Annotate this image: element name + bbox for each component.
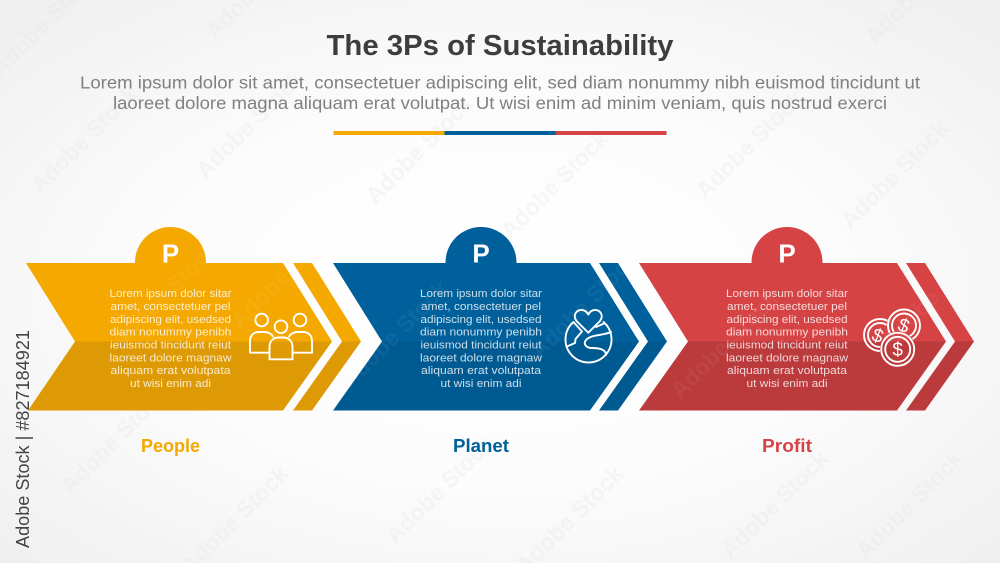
profit description: adipiscing elit, usedsed <box>726 314 848 326</box>
tricolor divider <box>334 131 666 135</box>
planet description <box>420 288 543 390</box>
watermark pattern: Adobe Stock <box>715 445 833 563</box>
faint watermark over arrows: Adobe Stock <box>525 245 643 363</box>
profit badge <box>752 227 822 298</box>
faint watermark over arrows: Adobe Stock <box>335 275 453 393</box>
planet description: diam nonummy penibh <box>420 326 542 338</box>
icon: coins: $ <box>895 315 912 338</box>
planet badge <box>446 227 516 298</box>
people description: diam nonummy penibh <box>110 326 232 338</box>
planet description: ut wisi enim adi <box>440 378 522 390</box>
faint watermark over arrows: Adobe Stock <box>665 285 783 403</box>
profit description: diam nonummy penibh <box>726 326 848 338</box>
profit label: Profit <box>762 436 812 456</box>
icon: people <box>250 314 312 359</box>
watermark pattern: Adobe Stock <box>495 125 613 243</box>
people description: laoreet dolore magnaw <box>110 352 232 364</box>
subtitle text: laoreet dolore magna aliquam erat volutpat. Ut wisi enim ad minim veniam, quis nostrud exerci <box>113 93 887 113</box>
people description <box>110 288 232 390</box>
panel: people <box>26 227 361 456</box>
profit description: ieuismod tincidunt reiut <box>726 340 848 352</box>
watermark pattern: Adobe Stock <box>190 65 308 183</box>
icon: coins <box>864 310 920 366</box>
people badge: P <box>162 238 179 268</box>
people description: adipiscing elit, usedsed <box>110 314 231 326</box>
profit badge: P <box>778 238 796 268</box>
people description: ut wisi enim adi <box>130 378 211 390</box>
watermark pattern: Adobe Stock <box>360 90 478 208</box>
faint watermark over arrows: Adobe Stock <box>875 235 993 353</box>
subtitle text: Lorem ipsum dolor sit amet, consectetuer adipiscing elit, sed diam nonummy nibh euismod tincidunt ut <box>80 72 920 92</box>
subtitle text <box>80 72 920 113</box>
planet label: Planet <box>453 436 509 456</box>
people arrow <box>26 263 361 410</box>
watermark pattern: Adobe Stock <box>25 80 143 198</box>
planet description: amet, consectetuer pel <box>421 301 541 313</box>
planet description: Lorem ipsum dolor sitar <box>420 288 543 300</box>
faint watermark over arrows: Adobe Stock <box>225 215 343 333</box>
icon: coins: $ <box>869 325 886 348</box>
title: The 3Ps of Sustainability <box>326 30 674 62</box>
watermark pattern: Adobe Stock <box>380 430 498 548</box>
watermark pattern: Adobe Stock <box>850 445 968 563</box>
profit arrow <box>639 263 974 410</box>
people badge <box>135 227 206 298</box>
icon: coins: $ <box>892 340 903 361</box>
people description: aliquam erat volutpata <box>110 365 231 377</box>
planet arrow <box>333 263 667 410</box>
planet description: ieuismod tincidunt reiut <box>420 340 542 352</box>
icon: planet with heart <box>565 310 612 362</box>
profit description: aliquam erat volutpata <box>727 365 847 377</box>
stock id label: Adobe Stock | #827184921 <box>13 330 33 548</box>
watermark pattern: Adobe Stock <box>55 380 173 498</box>
planet description: aliquam erat volutpata <box>421 365 541 377</box>
profit description: amet, consectetuer pel <box>727 301 847 313</box>
planet badge: P <box>472 238 490 268</box>
profit description: ut wisi enim adi <box>746 378 828 390</box>
faint watermark over arrows <box>105 215 993 403</box>
people label: People <box>141 436 200 456</box>
people description: amet, consectetuer pel <box>110 301 230 313</box>
watermark pattern: Adobe Stock <box>690 85 808 203</box>
planet description: laoreet dolore magnaw <box>420 352 542 364</box>
profit description <box>726 288 849 390</box>
profit description: laoreet dolore magnaw <box>726 352 848 364</box>
people description: ieuismod tincidunt reiut <box>110 340 231 352</box>
faint watermark over arrows: Adobe Stock <box>105 235 223 353</box>
panel: profit <box>639 227 974 456</box>
panel: planet <box>333 227 667 456</box>
people description: Lorem ipsum dolor sitar <box>110 288 232 300</box>
watermark pattern: Adobe Stock <box>835 115 953 233</box>
profit description: Lorem ipsum dolor sitar <box>726 288 849 300</box>
planet description: adipiscing elit, usedsed <box>420 314 542 326</box>
